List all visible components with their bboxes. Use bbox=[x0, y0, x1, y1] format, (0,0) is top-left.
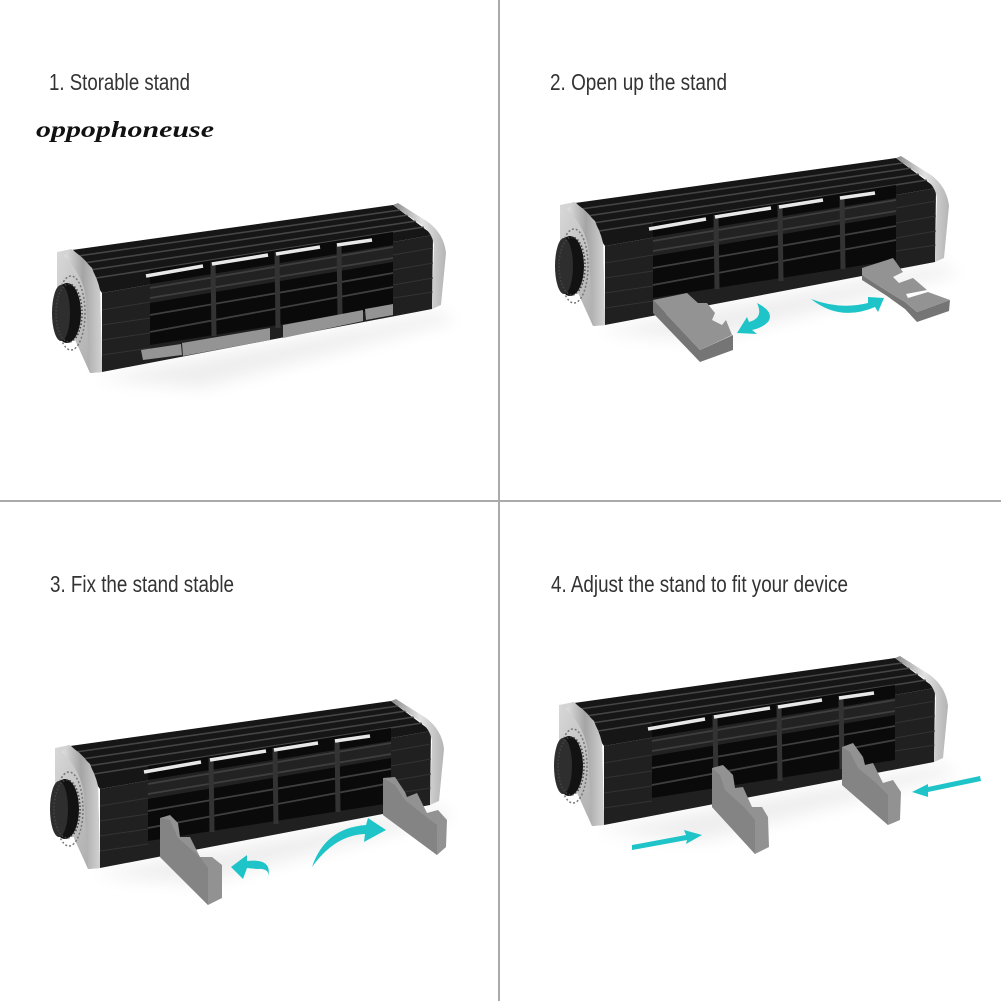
stand: right, folded out bbox=[862, 258, 950, 322]
stand: right, upright bbox=[383, 777, 447, 855]
arrow: left stand bbox=[231, 855, 269, 880]
arrow: pointing right bbox=[632, 830, 702, 850]
fan bbox=[555, 156, 958, 341]
fan with stored stand bbox=[52, 203, 455, 388]
fan bbox=[554, 656, 957, 841]
stand: left, folded out bbox=[653, 293, 733, 362]
arrow: pointing left bbox=[912, 776, 981, 797]
panel: step 2 open up the stand bbox=[550, 69, 958, 362]
watermark: oppophoneuse bbox=[36, 117, 214, 142]
stand: right, moved inward bbox=[842, 743, 901, 825]
panel: step 4 adjust the stand bbox=[551, 571, 981, 854]
panel: step 1 storable stand bbox=[36, 69, 455, 388]
heading: step 3: 3. Fix the stand stable bbox=[50, 571, 234, 597]
arrow: left stand bbox=[737, 303, 770, 334]
stand: left, moved inward bbox=[712, 765, 769, 854]
arrow: right stand bbox=[312, 818, 386, 867]
panel: step 3 fix the stand stable bbox=[50, 571, 453, 905]
arrow: right stand bbox=[811, 297, 884, 313]
heading: step 1: 1. Storable stand bbox=[49, 69, 190, 95]
fan bbox=[50, 699, 453, 884]
stand: left, upright bbox=[160, 815, 222, 905]
heading: step 4: 4. Adjust the stand to fit your device bbox=[551, 571, 848, 597]
heading: step 2: 2. Open up the stand bbox=[550, 69, 727, 95]
